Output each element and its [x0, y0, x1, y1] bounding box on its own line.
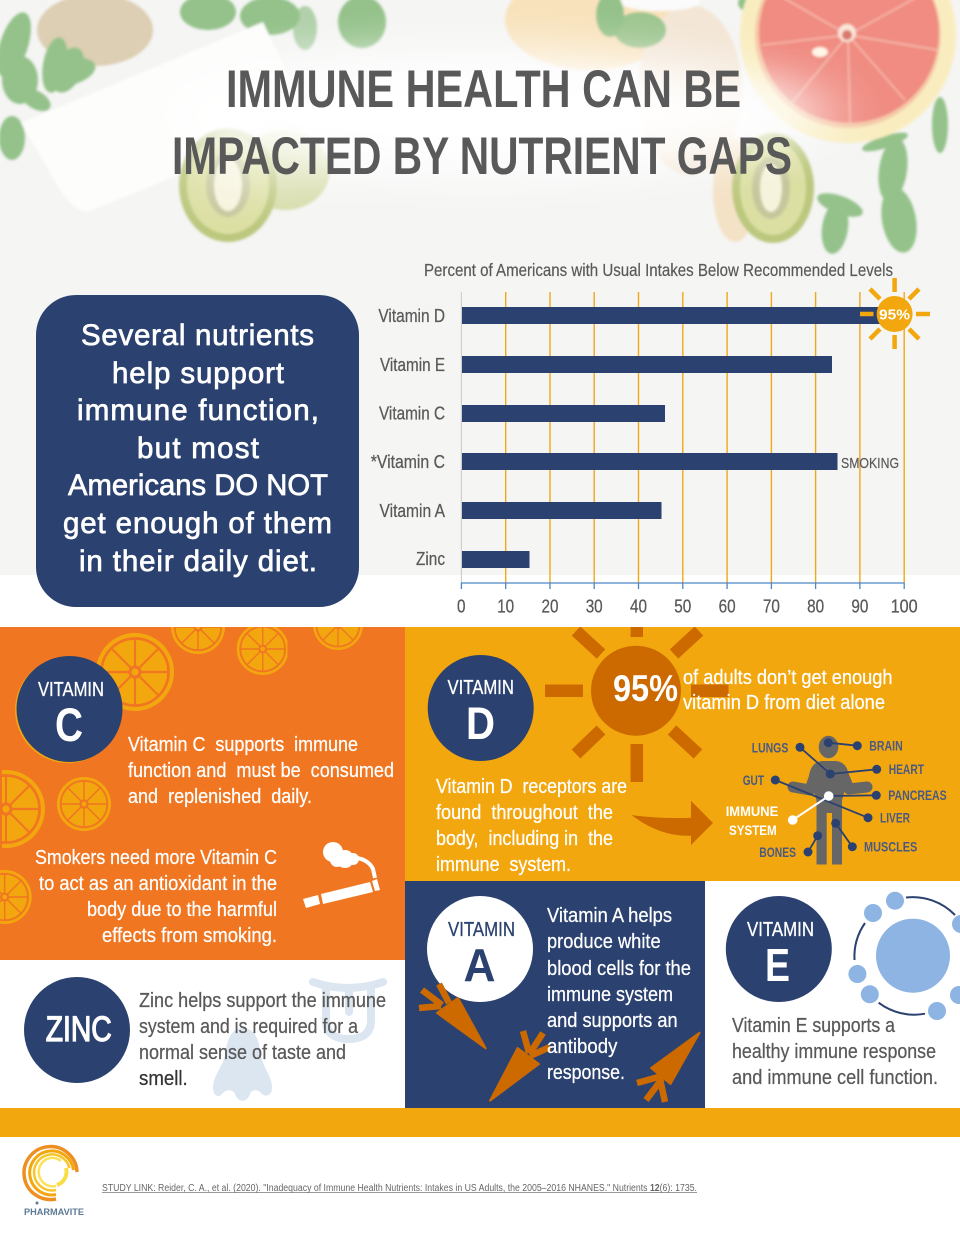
category labels	[371, 305, 446, 569]
panel: vitamin A	[405, 881, 705, 1108]
title: IMMUNE HEALTH CAN BE	[226, 60, 741, 119]
category labels: Vitamin C	[379, 402, 445, 424]
smoking label: SMOKING	[841, 455, 899, 472]
vitamin E badge: VITAMIN	[747, 919, 814, 941]
axis numbers: 30	[586, 596, 603, 616]
immune system label	[726, 803, 778, 838]
vitamin A description	[547, 905, 691, 1084]
axis numbers: 70	[763, 596, 780, 616]
panel: zinc	[0, 960, 405, 1108]
smokers text: effects from smoking.	[102, 925, 277, 947]
kiwis	[260, 132, 331, 212]
axis numbers: 0	[457, 596, 466, 616]
axis numbers: 100	[891, 596, 918, 616]
panel: summary callout: but most	[137, 432, 259, 465]
vitamin C description: function and must be consumed	[128, 760, 394, 782]
axis numbers: 90	[851, 596, 868, 616]
amber footer band	[0, 1108, 960, 1137]
panel: summary callout: help support	[112, 357, 284, 390]
vitamin D description: found throughout the	[436, 802, 613, 824]
icon: carrots	[419, 984, 700, 1102]
zinc badge: ZINC	[46, 1010, 112, 1049]
organ labels: LIVER	[880, 810, 910, 826]
axis numbers: 50	[674, 596, 691, 616]
statistic caption	[683, 667, 892, 714]
bar chart: percent below recommended levels	[371, 260, 930, 616]
category labels: Vitamin D	[378, 305, 445, 326]
vitamin A description: and supports an	[547, 1010, 678, 1032]
vitamin E description	[732, 1015, 938, 1089]
icon: tongue	[313, 982, 383, 1039]
logo: Pharmavite	[24, 1147, 84, 1217]
zinc description: system and is required for a	[139, 1016, 359, 1038]
study link citation: STUDY LINK: Reider, C. A., et al. (2020). "Inadequacy of Immune Health Nutrients: Intakes in US Adults, the 2005–2016 NHANES." Nutrients 12(6): 1735.	[102, 1183, 697, 1194]
vitamin A badge: VITAMIN	[448, 919, 515, 941]
icon: nose	[213, 1028, 272, 1101]
category labels: Zinc	[416, 548, 445, 569]
chart title: Percent of Americans with Usual Intakes Below Recommended Levels	[424, 260, 893, 280]
smokers text	[35, 847, 277, 947]
axis numbers: 40	[630, 596, 647, 616]
icon: immune cell	[848, 892, 960, 1020]
zinc description: Zinc helps support the immune	[139, 990, 386, 1012]
statistic caption: vitamin D from diet alone	[683, 692, 885, 714]
grapefruit	[740, 0, 956, 143]
vitamin A description: blood cells for the	[547, 958, 691, 980]
panel: summary callout: Americans DO NOT	[68, 469, 328, 502]
vitamin C description	[128, 734, 394, 808]
axis numbers: 80	[807, 596, 824, 616]
panel: summary callout: immune function,	[77, 394, 319, 427]
panel: summary callout: in their daily diet.	[79, 545, 317, 578]
organ labels: BONES	[759, 844, 796, 860]
icon: cigarette	[303, 842, 380, 908]
vitamin C description: Vitamin C supports immune	[128, 734, 358, 756]
smokers text: Smokers need more Vitamin C	[35, 847, 277, 869]
panel: summary callout: get enough of them	[63, 507, 332, 540]
vitamin C badge	[15, 656, 122, 763]
vitamin E description: Vitamin E supports a	[732, 1015, 896, 1037]
vitamin E badge: E	[765, 939, 790, 991]
panel: summary callout: Several nutrients	[81, 319, 314, 352]
panel: summary callout	[36, 295, 359, 607]
receptor lines	[775, 743, 877, 852]
zinc description: normal sense of taste and	[139, 1042, 346, 1064]
arrow	[632, 801, 713, 845]
vitamin E description: and immune cell function.	[732, 1067, 938, 1089]
icon: large sun	[545, 620, 728, 782]
vitamin D badge: D	[466, 698, 495, 749]
title: IMPACTED BY NUTRIENT GAPS	[172, 127, 792, 186]
icon: sun 95% badge: 95%	[879, 306, 910, 324]
panel: vitamin E	[726, 892, 960, 1084]
vitamin A description: Vitamin A helps	[547, 905, 672, 927]
vitamin C badge: VITAMIN	[38, 679, 104, 701]
category labels: *Vitamin C	[371, 451, 445, 472]
smokers text: to act as an antioxidant in the	[39, 873, 277, 895]
vitamin D description: immune system.	[436, 854, 571, 876]
vitamin A description: response.	[547, 1062, 625, 1084]
axis numbers	[457, 596, 918, 616]
icon: sun 95% badge	[860, 278, 930, 349]
panel: vitamin C	[0, 600, 405, 960]
vitamin E description: healthy immune response	[732, 1041, 936, 1063]
smokers text: body due to the harmful	[87, 899, 277, 921]
vitamin D description: Vitamin D receptors are	[436, 776, 627, 798]
vitamin C badge: C	[55, 698, 83, 751]
category labels: Vitamin E	[380, 354, 445, 375]
organ labels: LUNGS	[752, 739, 788, 755]
zinc description	[139, 990, 386, 1090]
title	[172, 60, 792, 186]
95% statistic: 95%	[613, 668, 678, 709]
vitamin D description	[436, 776, 627, 876]
organ labels: GUT	[743, 772, 764, 788]
vitamin D badge: VITAMIN	[448, 677, 514, 699]
vitamin A description: antibody	[547, 1036, 617, 1058]
statistic caption: of adults don’t get enough	[683, 667, 892, 689]
zinc description: smell.	[139, 1068, 188, 1090]
background photo: food flat-lay	[0, 0, 960, 575]
organ labels: HEART	[889, 761, 924, 777]
organ labels: MUSCLES	[864, 839, 917, 855]
panel: vitamin D	[405, 620, 960, 881]
vitamin E badge	[726, 896, 832, 1002]
axis numbers: 20	[542, 596, 558, 616]
diagram: body with vitamin D receptors	[726, 736, 947, 864]
organ labels: BRAIN	[869, 737, 903, 753]
body figure	[809, 736, 849, 864]
logo: Pharmavite: PHARMAVITE	[24, 1207, 84, 1217]
bars	[462, 307, 882, 568]
immune system label: SYSTEM	[729, 822, 777, 838]
vitamin A badge: A	[464, 939, 496, 991]
vitamin A badge	[427, 896, 533, 1002]
vitamin C description: and replenished daily.	[128, 786, 312, 808]
immune system label: IMMUNE	[726, 803, 778, 819]
orange slice pattern	[0, 600, 363, 924]
vitamin D badge	[428, 655, 534, 761]
zinc badge	[24, 977, 130, 1083]
category labels: Vitamin A	[380, 500, 446, 521]
vitamin A description: immune system	[547, 984, 673, 1006]
organ labels	[743, 737, 947, 860]
vitamin A description: produce white	[547, 931, 661, 953]
vitamin D description: body, including in the	[436, 828, 613, 850]
axis numbers: 60	[719, 596, 736, 616]
axis numbers: 10	[497, 596, 514, 616]
